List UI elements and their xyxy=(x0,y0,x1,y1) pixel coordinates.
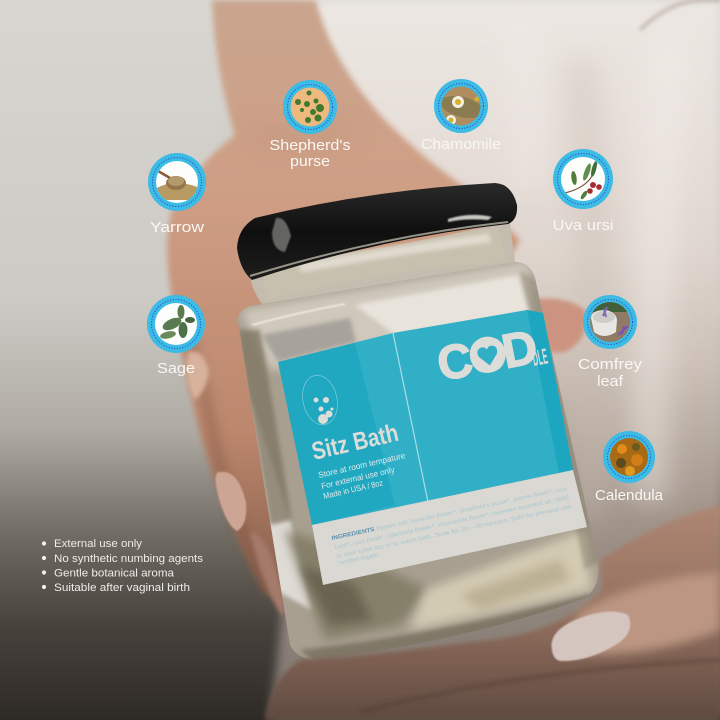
fingernail: bottom xyxy=(551,611,630,661)
label: Comfrey leaf: leaf xyxy=(597,373,624,390)
ingredients text: to over toilet sitz or to warm bath. Soak for 20 – 30 minutes. Safe for prenatal use xyxy=(336,504,572,560)
blue product label xyxy=(278,310,587,585)
ingredient badge: Comfrey leaf xyxy=(583,295,637,349)
bullet list of features xyxy=(42,538,203,594)
label small print: For external use only xyxy=(320,464,396,491)
bullet list of features: Suitable after vaginal birth xyxy=(54,582,190,594)
label: Chamomile: Chamomile xyxy=(421,136,501,153)
arm and holding hand xyxy=(167,0,520,620)
label small print: Made in USA / 8oz xyxy=(322,477,384,501)
fingernail: thumb upper xyxy=(186,351,209,400)
label: Comfrey leaf xyxy=(578,356,643,390)
label small print xyxy=(317,450,406,501)
bullet list of features: External use only xyxy=(54,538,142,550)
blue product label: DLE xyxy=(530,344,550,371)
ingredients text: Leaf*, rose petal*, calendula flower*, chamomile flower*, lavender essential oil, DIRE xyxy=(334,495,570,551)
label: Comfrey leaf: Comfrey xyxy=(578,356,643,373)
ingredient badge: Shepherd's purse xyxy=(283,80,337,134)
bullet list of features: Gentle botanical aroma xyxy=(54,568,175,580)
ingredient badge: Calendula xyxy=(603,431,655,483)
fingernail: left xyxy=(216,472,246,531)
ingredients text xyxy=(331,486,572,567)
product name: Sitz Bath xyxy=(309,419,401,466)
jar neck xyxy=(250,222,516,304)
jar lid xyxy=(237,183,517,300)
brand logo COD: O xyxy=(464,327,511,386)
label: Sage: Sage xyxy=(157,360,195,377)
ingredients text: *certified organic xyxy=(337,552,380,567)
label: Uva ursi: Uva ursi xyxy=(552,217,614,234)
label divider line xyxy=(393,333,428,502)
label: Shepherd's purse: Shepherd's xyxy=(270,137,350,154)
jar contents: salt and herbs xyxy=(238,260,600,668)
ingredient badge: Uva ursi xyxy=(553,149,613,209)
ingredient badge: Yarrow xyxy=(148,153,206,211)
brand logo COD: D xyxy=(498,321,542,379)
label: Calendula: Calendula xyxy=(595,487,664,504)
label: Shepherd's purse xyxy=(270,137,350,170)
ingredients text: INGREDIENTS Epsom salt, lavender flower*, shepherd's purse*, yarrow flower*, uva xyxy=(331,486,568,542)
label: Shepherd's purse: purse xyxy=(290,153,330,170)
brand logo COD: C xyxy=(433,333,477,392)
white ingredients strip xyxy=(312,470,587,585)
label small print: Store at room tempature xyxy=(317,450,406,480)
brand logo COD xyxy=(433,321,542,392)
jar body xyxy=(238,262,599,660)
glass jar xyxy=(237,183,600,668)
bubble logo xyxy=(298,372,342,428)
fingertip behind jar, right xyxy=(525,298,586,353)
bullet list of features: No synthetic numbing agents xyxy=(54,553,203,565)
ingredient badge: Chamomile xyxy=(434,79,488,133)
ingredient badge: Sage xyxy=(147,295,205,353)
label: Yarrow: Yarrow xyxy=(150,219,204,236)
cradling hand at bottom right xyxy=(265,505,720,720)
lower left fingers xyxy=(250,530,285,616)
